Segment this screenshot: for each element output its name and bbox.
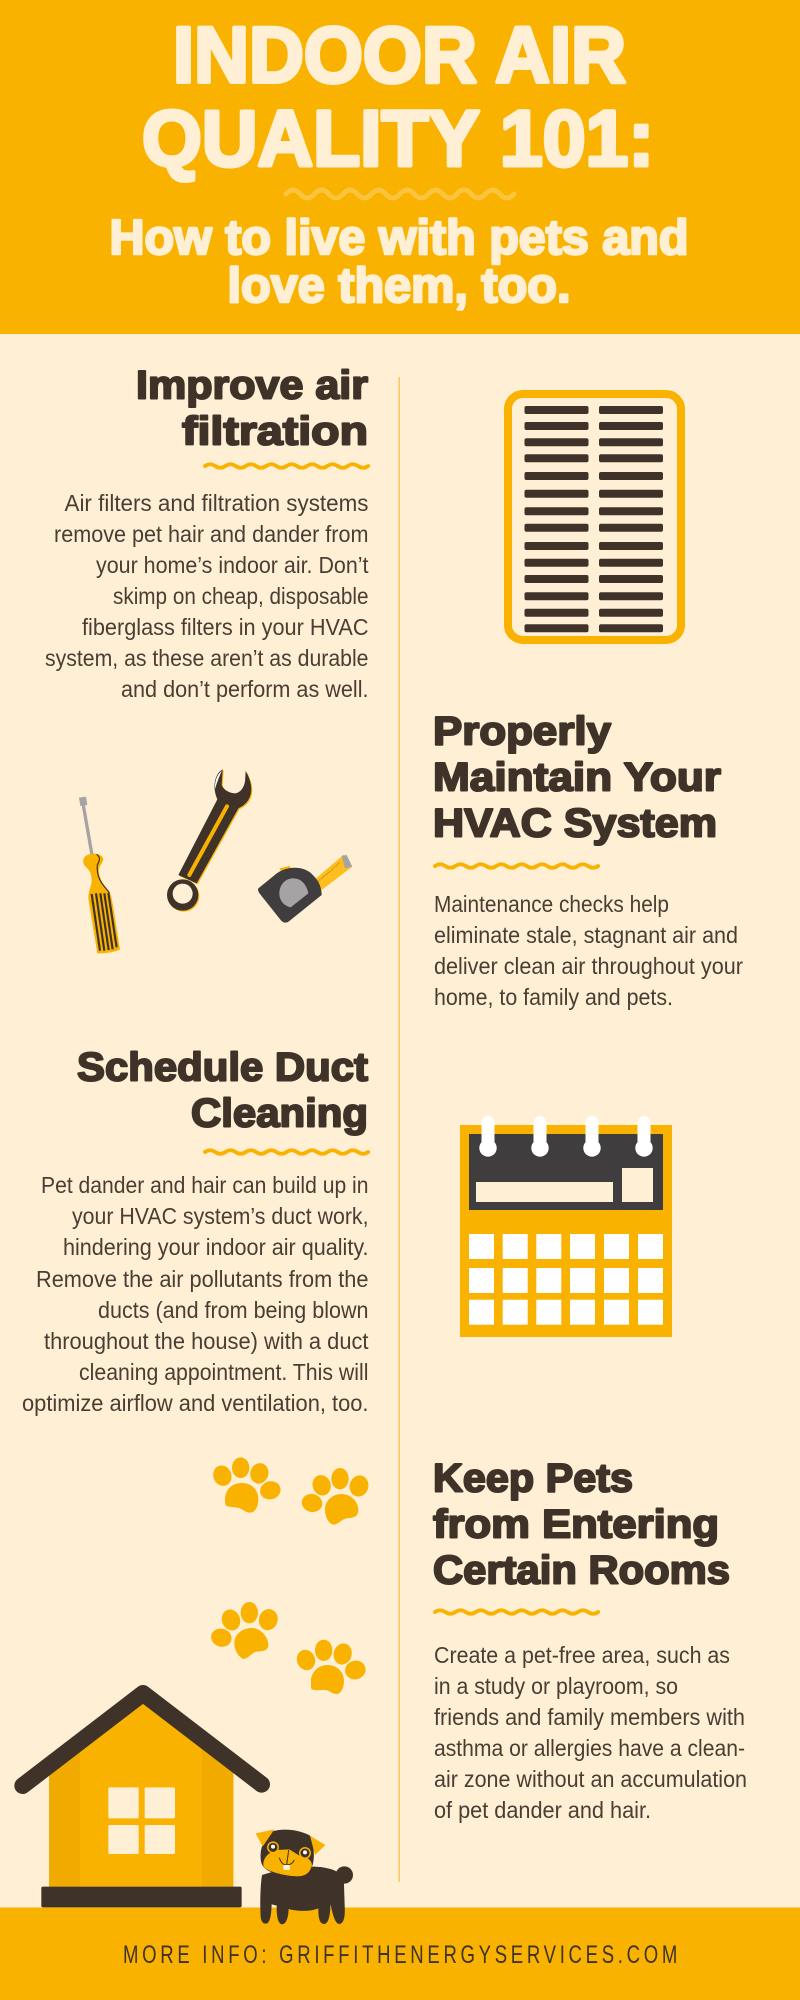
subtitle	[110, 211, 688, 313]
body text: asthma or allergies have a clean-	[434, 1735, 745, 1761]
body text: your home’s indoor air. Don’t	[96, 552, 369, 578]
icon: tape measure	[258, 855, 352, 923]
header banner	[0, 0, 800, 334]
heading: properly maintain your hvac system: Maintain Your	[433, 756, 721, 800]
icon: air filter	[508, 394, 681, 640]
body text: remove pet hair and dander from	[54, 521, 368, 547]
paw print 3	[209, 1602, 280, 1659]
heading: improve air filtration: filtration	[182, 410, 368, 454]
heading: properly maintain your hvac system: HVAC System	[433, 802, 717, 846]
body text: and don’t perform as well.	[121, 676, 368, 702]
body text: cleaning appointment. This will	[79, 1359, 368, 1385]
body text: skimp on cheap, disposable	[113, 583, 368, 609]
body text	[434, 1642, 747, 1823]
paw print 4	[294, 1640, 368, 1694]
subtitle: How to live with pets and	[110, 211, 688, 265]
section: improve air filtration	[45, 364, 369, 702]
section: keep pets from entering certain rooms	[433, 1456, 747, 1823]
section: properly maintain your hvac system	[433, 710, 743, 1010]
heading: schedule duct cleaning: Schedule Duct	[77, 1046, 368, 1090]
body text: Pet dander and hair can build up in	[41, 1172, 368, 1198]
subtitle: love them, too.	[228, 259, 570, 313]
body text: eliminate stale, stagnant air and	[434, 922, 738, 948]
footer band	[0, 1908, 800, 2000]
body text: fiberglass filters in your HVAC	[82, 614, 368, 640]
body text: your HVAC system’s duct work,	[72, 1203, 368, 1229]
icon: paw prints	[209, 1457, 371, 1694]
icon: pug dog	[256, 1829, 353, 1924]
heading: properly maintain your hvac system	[433, 710, 721, 846]
icon: house	[23, 1693, 262, 1907]
body text: Maintenance checks help	[434, 891, 669, 917]
body text: deliver clean air throughout your	[434, 953, 743, 979]
icon: screwdriver	[79, 797, 120, 953]
body text: in a study or playroom, so	[434, 1673, 678, 1699]
wavy underline	[435, 1610, 598, 1614]
header wavy divider	[286, 190, 514, 198]
center vertical divider	[398, 377, 400, 1882]
icon: calendar	[460, 1116, 672, 1337]
body text: throughout the house) with a duct	[44, 1328, 369, 1354]
icon: wrench	[167, 769, 252, 912]
wavy underline	[205, 1150, 368, 1154]
body text: home, to family and pets.	[434, 984, 673, 1010]
heading: improve air filtration: Improve air	[136, 364, 368, 408]
body text: Create a pet-free area, such as	[434, 1642, 730, 1668]
body text: air zone without an accumulation	[434, 1766, 747, 1792]
body text	[22, 1172, 369, 1416]
section: schedule duct cleaning	[22, 1046, 369, 1416]
body text: friends and family members with	[434, 1704, 745, 1730]
body text: Remove the air pollutants from the	[36, 1266, 368, 1292]
wavy underline	[435, 864, 598, 868]
title	[142, 10, 654, 182]
title: QUALITY 101:	[142, 94, 654, 182]
paw print 1	[210, 1457, 283, 1513]
heading: keep pets from entering certain rooms: from Entering	[433, 1502, 719, 1546]
heading: keep pets from entering certain rooms: Keep Pets	[433, 1456, 633, 1500]
body text: system, as these aren’t as durable	[45, 645, 368, 671]
heading: schedule duct cleaning	[77, 1046, 368, 1136]
heading: schedule duct cleaning: Cleaning	[191, 1092, 368, 1136]
body text: of pet dander and hair.	[434, 1797, 651, 1823]
body text: Air filters and filtration systems	[64, 490, 368, 516]
heading: properly maintain your hvac system: Properly	[433, 710, 612, 754]
heading: keep pets from entering certain rooms	[433, 1456, 730, 1592]
body text	[434, 891, 743, 1010]
wavy underline	[205, 464, 368, 468]
body text: optimize airflow and ventilation, too.	[22, 1390, 368, 1416]
body text: hindering your indoor air quality.	[63, 1234, 368, 1260]
body text	[45, 490, 369, 702]
title: INDOOR AIR	[173, 10, 626, 99]
body text: ducts (and from being blown	[98, 1297, 368, 1323]
paw print 2	[300, 1468, 371, 1525]
heading: improve air filtration	[136, 364, 368, 454]
heading: keep pets from entering certain rooms: Certain Rooms	[433, 1548, 730, 1592]
